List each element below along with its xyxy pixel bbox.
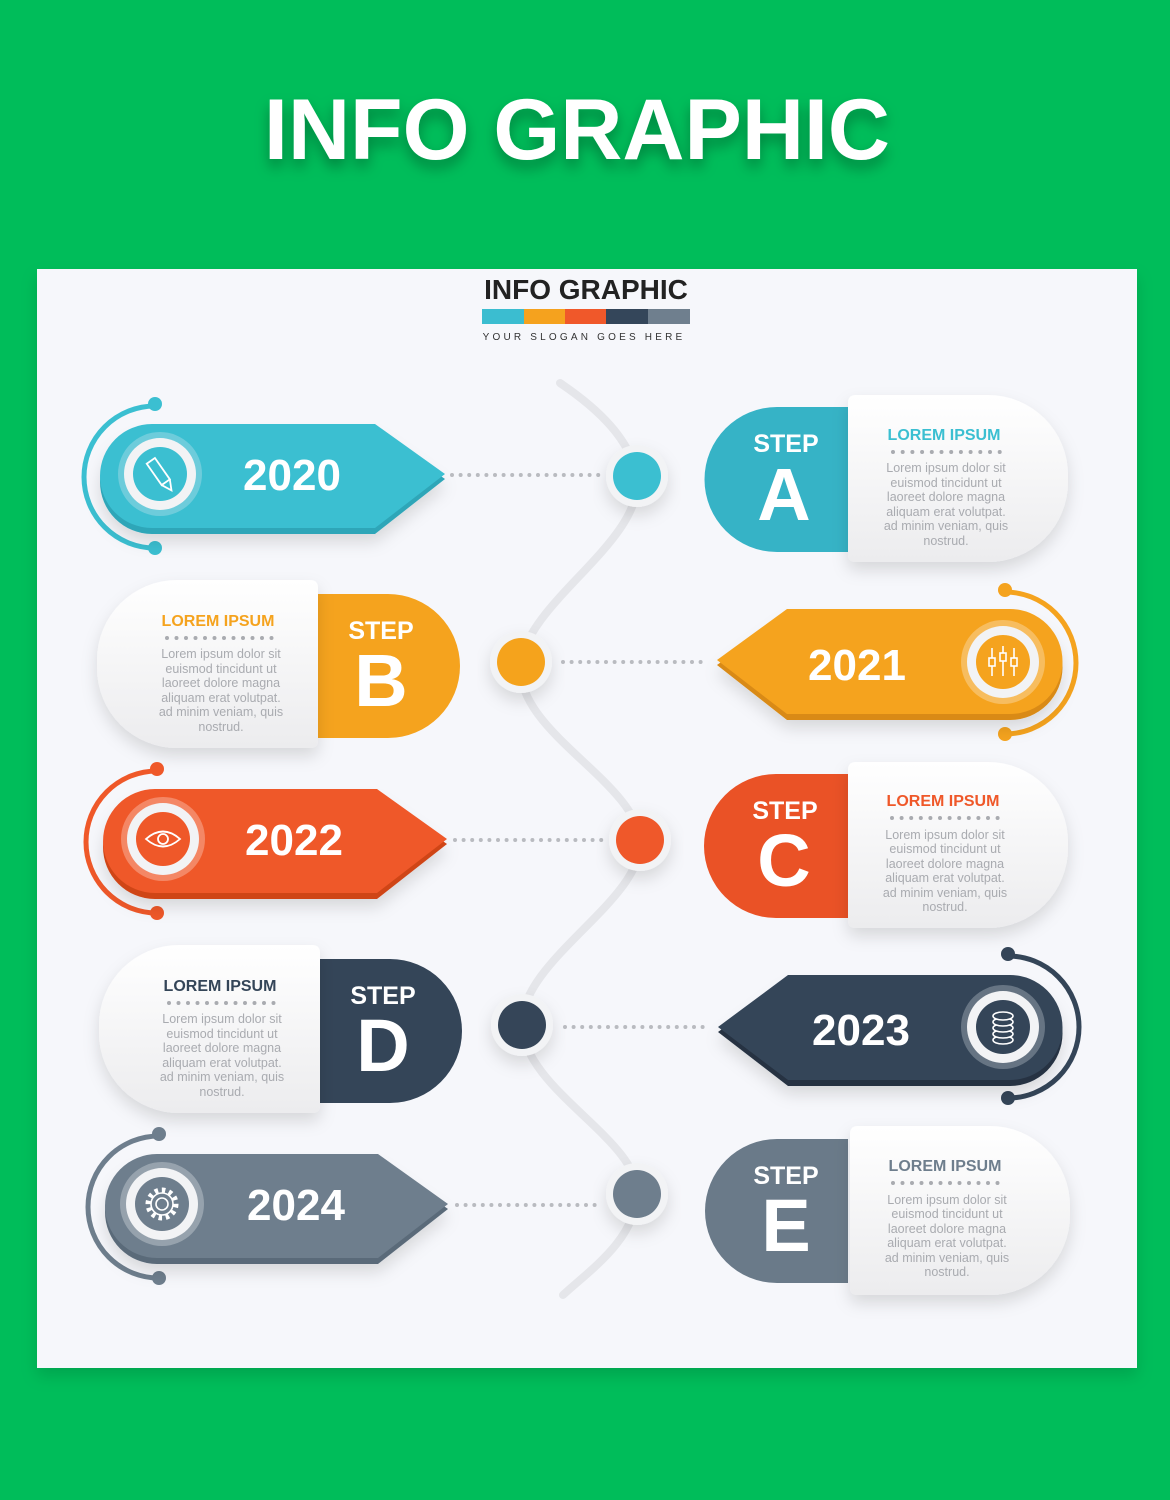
row 2: step B card: aliquam erat volutpat. — [161, 691, 281, 705]
row 2: step B card: nostrud. — [198, 720, 244, 734]
row 5: 2024 banner — [88, 1127, 448, 1285]
step A card: aliquam erat volutpat. — [886, 505, 1006, 519]
node 2 — [490, 631, 552, 693]
row 3: 2022 banner: 2022 — [245, 816, 343, 865]
step C card: euismod tincidunt ut — [889, 842, 1001, 856]
2021 banner — [717, 583, 1076, 741]
row 4: step D card: aliquam erat volutpat. — [162, 1056, 282, 1070]
row 4: step D card: D — [356, 1004, 410, 1087]
step C card — [704, 762, 1068, 928]
step C card: laoreet dolore magna — [886, 857, 1004, 871]
row 1: 2020 banner: 2020 — [243, 451, 341, 500]
row 5: 2024 banner: 2024 — [247, 1181, 345, 1230]
step A card: nostrud. — [923, 534, 969, 548]
step A card: LOREM IPSUM — [888, 427, 1000, 444]
node 5 — [606, 1163, 668, 1225]
step E card: euismod tincidunt ut — [891, 1207, 1003, 1221]
title: INFO GRAPHIC — [264, 82, 890, 178]
step E card: Lorem ipsum dolor sit — [887, 1193, 1007, 1207]
dotted connector 2 — [563, 660, 708, 664]
2023 banner: 2023 — [812, 1006, 910, 1055]
row 1: 2020 banner — [84, 397, 445, 555]
row 2: step B card: Lorem ipsum dolor sit — [161, 647, 281, 661]
step E card — [705, 1126, 1070, 1295]
step C card: aliquam erat volutpat. — [885, 871, 1005, 885]
row 4: step D card: nostrud. — [199, 1085, 245, 1099]
step E card: E — [761, 1184, 811, 1267]
dotted connector 4 — [565, 1025, 710, 1029]
node 1 — [606, 445, 668, 507]
step A card: A — [757, 453, 811, 536]
2021 banner: 2021 — [808, 641, 906, 690]
row 4: step D card — [99, 945, 462, 1113]
step C card: C — [757, 819, 811, 902]
row 2: step B card: LOREM IPSUM — [162, 613, 274, 630]
row 3: 2022 banner — [86, 762, 447, 920]
step C card: LOREM IPSUM — [887, 793, 999, 810]
icon: pencil — [147, 458, 176, 493]
step A card: ad minim veniam, quis — [884, 519, 1008, 533]
row 2: step B card — [97, 580, 460, 748]
row 4: step D card: STEP — [350, 982, 416, 1010]
row 2: step B card: ad minim veniam, quis — [159, 705, 283, 719]
icon: eye — [146, 832, 180, 846]
step A card: laoreet dolore magna — [887, 490, 1005, 504]
step A card — [704, 395, 1068, 562]
row 2: step B card: STEP — [348, 617, 414, 645]
dotted connector 5 — [457, 1203, 602, 1207]
step E card: STEP — [753, 1162, 819, 1190]
dotted connector 3 — [455, 838, 602, 842]
row 4: step D card: LOREM IPSUM — [164, 978, 276, 995]
wavy timeline path — [521, 383, 640, 1295]
row 2: step B card: euismod tincidunt ut — [165, 662, 277, 676]
step E card: LOREM IPSUM — [889, 1158, 1001, 1175]
node 4 — [491, 994, 553, 1056]
step C card: Lorem ipsum dolor sit — [885, 828, 1005, 842]
row 4: step D card: Lorem ipsum dolor sit — [162, 1012, 282, 1026]
dotted connector 1 — [452, 473, 600, 477]
step E card: aliquam erat volutpat. — [887, 1236, 1007, 1250]
2023 banner — [718, 947, 1079, 1105]
row 4: step D card: laoreet dolore magna — [163, 1041, 281, 1055]
icon: database — [993, 1012, 1013, 1044]
step A card: Lorem ipsum dolor sit — [886, 461, 1006, 475]
node 3 — [609, 809, 671, 871]
step C card: STEP — [752, 797, 818, 825]
header logo: INFO GRAPHIC — [484, 274, 688, 305]
step C card: nostrud. — [922, 900, 968, 914]
row 4: step D card: ad minim veniam, quis — [160, 1070, 284, 1084]
step C card: ad minim veniam, quis — [883, 886, 1007, 900]
icon: gear — [148, 1190, 176, 1218]
row 4: step D card: euismod tincidunt ut — [166, 1027, 278, 1041]
step E card: nostrud. — [924, 1265, 970, 1279]
icon: sliders — [989, 646, 1017, 676]
header logo: YOUR SLOGAN GOES HERE — [483, 332, 685, 343]
row 2: step B card: B — [354, 639, 408, 722]
step E card: laoreet dolore magna — [888, 1222, 1006, 1236]
step A card: euismod tincidunt ut — [890, 476, 1002, 490]
step E card: ad minim veniam, quis — [885, 1251, 1009, 1265]
header logo — [482, 274, 690, 343]
panel: main board — [37, 269, 1137, 1368]
row 2: step B card: laoreet dolore magna — [162, 676, 280, 690]
step A card: STEP — [753, 430, 819, 458]
